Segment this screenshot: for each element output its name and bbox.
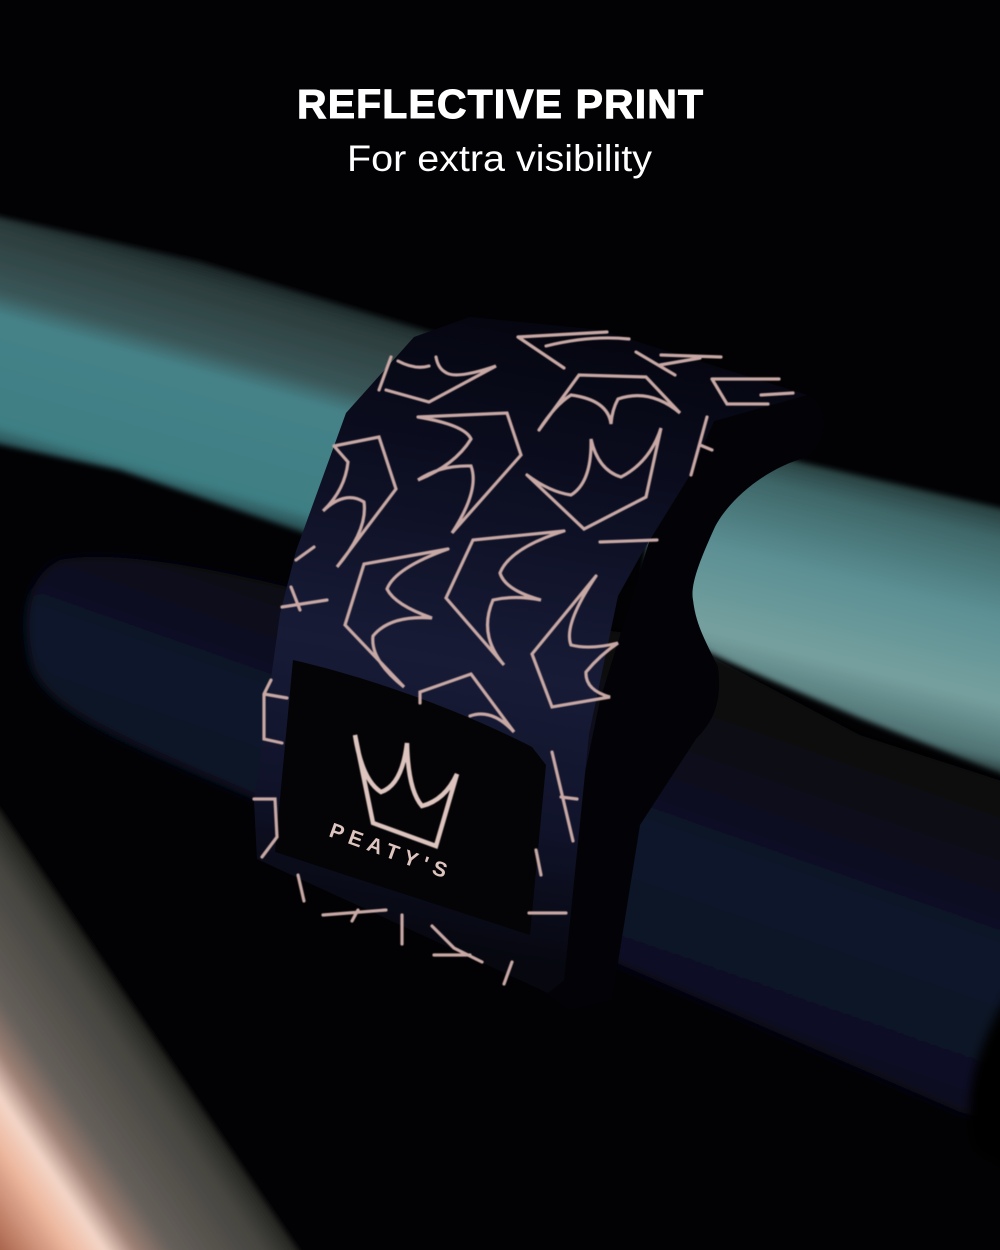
subtitle: For extra visibility xyxy=(347,138,653,179)
teal tube, right section xyxy=(640,420,1000,785)
reflective strap xyxy=(254,317,807,993)
reflective crown print xyxy=(254,332,793,984)
velcro patch xyxy=(275,660,546,935)
dark tube end right xyxy=(969,990,1000,1170)
navy lower tube xyxy=(26,557,1000,1130)
crown logo on patch xyxy=(355,735,457,846)
teal tube, left section xyxy=(0,210,440,570)
patch brand text: PEATY'S xyxy=(326,819,456,885)
pale bottom-left tube xyxy=(0,790,305,1250)
title: REFLECTIVE PRINT xyxy=(297,81,703,127)
heading xyxy=(297,81,703,179)
strap side shadow xyxy=(540,395,824,1010)
